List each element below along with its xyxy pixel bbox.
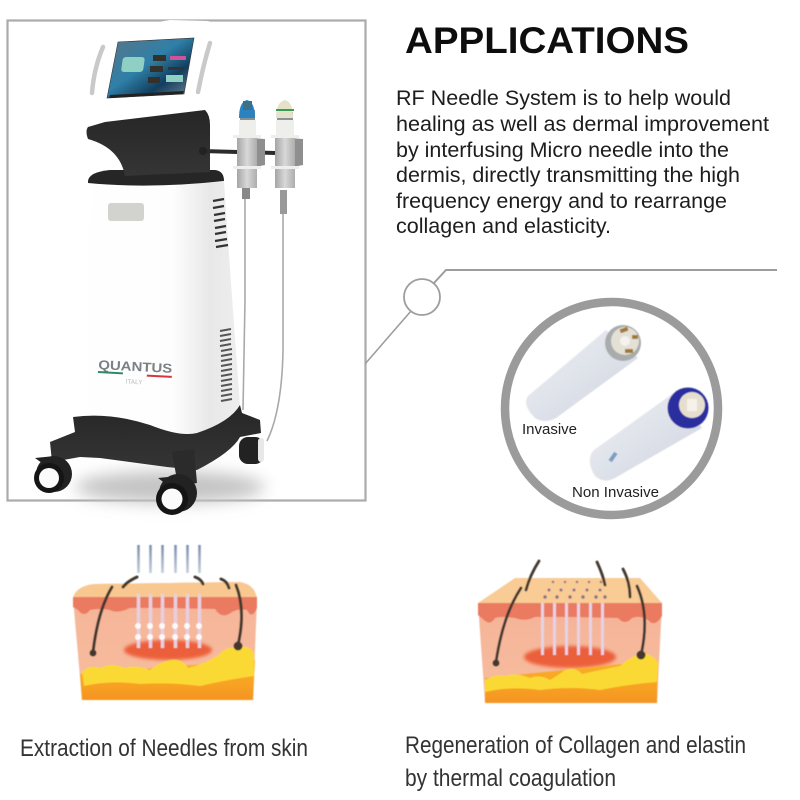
handpiece 2 <box>271 100 303 214</box>
text block: description: dermis, directly transmitting the high <box>396 164 740 187</box>
front wheel <box>156 474 197 515</box>
text block: description: RF Needle System is to help would <box>396 87 731 110</box>
machine body <box>73 182 240 434</box>
caption: regeneration of collagen: Regeneration of Collagen and elastin <box>405 732 746 759</box>
text block: description: frequency energy and to rearrange <box>396 190 727 213</box>
arm <box>202 151 275 153</box>
handpiece 1 <box>233 100 265 199</box>
monitor handles <box>92 43 210 93</box>
skin block <box>73 582 257 700</box>
image: RF needle machine <box>34 20 303 515</box>
badge <box>108 203 144 221</box>
text block: description: by interfusing Micro needle into the <box>396 139 729 162</box>
logo: QUANTUS <box>97 357 173 388</box>
collar <box>88 170 224 186</box>
needle sparks <box>135 623 202 640</box>
caption: extraction of needles: Extraction of Needles from skin <box>20 735 308 762</box>
rear wheel <box>239 437 264 464</box>
front leg <box>172 449 197 486</box>
text block: description <box>396 87 769 238</box>
dermis band <box>478 603 662 623</box>
base <box>50 405 261 470</box>
floor shadow <box>75 471 265 503</box>
text block: description: healing as well as dermal improvement <box>396 113 769 136</box>
neck <box>86 110 210 176</box>
title: APPLICATIONS <box>405 20 689 61</box>
cables <box>243 195 283 441</box>
heat zone <box>124 640 212 660</box>
diagram: collagen regeneration skin <box>478 561 662 703</box>
hair <box>93 577 242 652</box>
heat zone <box>524 646 616 668</box>
icon: non invasive tip <box>590 388 708 481</box>
text block: description: collagen and elasticity. <box>396 215 611 238</box>
screen <box>107 38 194 98</box>
panel: product photo frame <box>8 20 366 500</box>
logo: QUANTUS: ITALY <box>125 379 143 386</box>
caption: regeneration of collagen: by thermal coagulation <box>405 765 616 792</box>
icon: invasive tip <box>526 325 641 421</box>
yellow fat lumps <box>485 654 658 692</box>
callout: handpiece tips circle <box>505 302 718 515</box>
needle tracks <box>542 603 602 655</box>
caption: regeneration of collagen <box>405 732 746 792</box>
surface dots <box>543 581 607 599</box>
hair <box>496 561 645 662</box>
dermis band <box>73 597 257 615</box>
left wheel <box>34 456 72 493</box>
diagram: needle extraction skin <box>73 545 257 700</box>
skin block <box>478 603 662 703</box>
callout connector line <box>365 270 777 364</box>
yellow fat lumps <box>82 647 254 686</box>
fat layer <box>485 660 658 703</box>
upper vents <box>213 199 228 247</box>
needle tracks <box>138 594 200 648</box>
label: invasive: Invasive <box>522 421 577 438</box>
label: non invasive: Non Invasive <box>572 484 659 501</box>
needles above skin <box>138 545 200 573</box>
fat layer <box>80 660 255 700</box>
skin surface <box>478 578 662 603</box>
logo: QUANTUS: QUANTUS <box>98 357 173 376</box>
lower vents <box>220 329 232 401</box>
epidermis <box>73 582 257 600</box>
monitor housing <box>83 20 224 116</box>
